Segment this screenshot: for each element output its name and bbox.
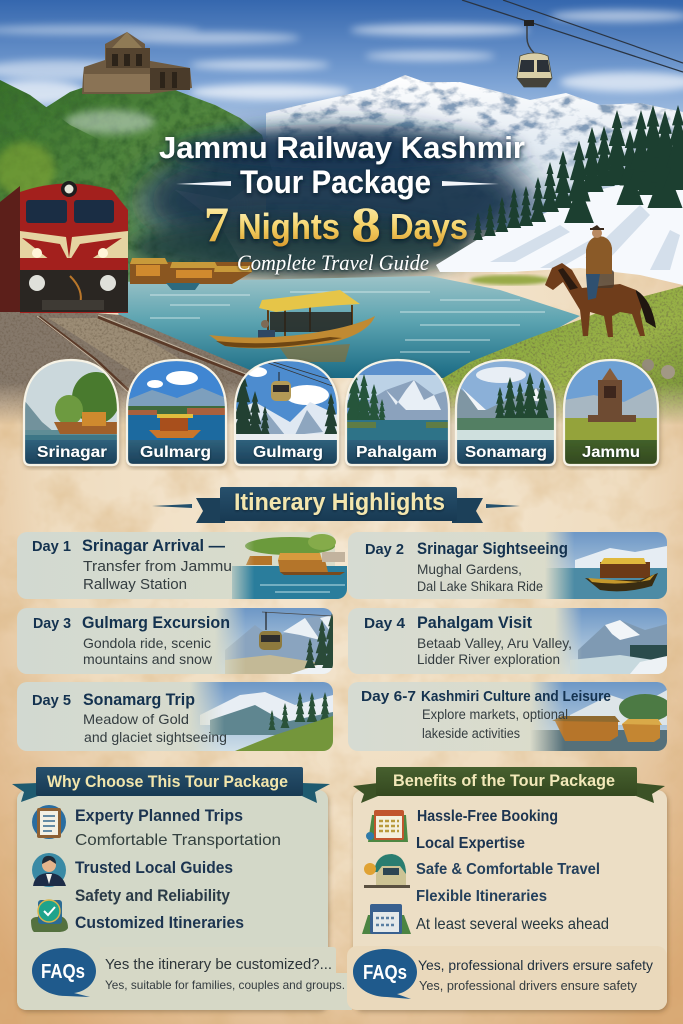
card: Sonamarg [456, 360, 555, 465]
scene: gondola over mountains [215, 608, 342, 674]
day description [83, 711, 227, 745]
itinerary row: Day 5 [17, 682, 333, 751]
icon: shield check [31, 900, 68, 932]
card: Jammu [564, 360, 658, 465]
title line: Tour Package with side rules: Tour Package [240, 164, 431, 200]
FAQ answer: Yes, suitable for families, couples and groups. [105, 978, 345, 992]
day title: Srinagar Arrival — [82, 536, 225, 555]
card label: Srinagar: Srinagar [37, 444, 107, 461]
snowy mountain range [266, 75, 683, 230]
lakeside houseboats [130, 258, 252, 290]
day description [83, 635, 213, 667]
benefit text: At least several weeks ahead [416, 916, 609, 933]
day label: Day 3 [33, 615, 71, 632]
scene: Sonamarg meadow [190, 682, 333, 751]
card: Pahalgam [344, 360, 449, 465]
itinerary row: Day 6-7 [348, 682, 671, 751]
icon: checklist clipboard [32, 805, 66, 839]
card label: Sonamarg: Sonamarg [465, 444, 547, 461]
title line: Jammu Railway Kashmir: Jammu Railway Kashmir [159, 130, 525, 165]
day label: Day 6-7 [361, 688, 416, 705]
card: Gulmarg gondola [231, 360, 339, 465]
FAQ question: Yes, professional drivers ersure safety [418, 957, 653, 973]
icon: local guide [32, 853, 66, 887]
pine forest [473, 105, 683, 240]
day description: lakeside activities [422, 726, 520, 741]
day title: Pahalgam Visit [417, 613, 532, 632]
benefit text: Comfortable Transportation [75, 832, 281, 849]
scene: shikara on lake [545, 532, 667, 599]
day description: Mughal Gardens, [417, 561, 522, 577]
benefit text: Trusted Local Guides [75, 859, 233, 877]
destination cards row [24, 360, 658, 465]
itinerary row: Day 4 [348, 608, 667, 674]
day label: Day 4 [364, 615, 406, 632]
fort hill with mist [46, 88, 266, 194]
scene: houseboats at leisure [530, 682, 671, 751]
card label: Gulmarg: Gulmarg [140, 444, 211, 461]
benefit text: Safe & Comfortable Travel [416, 861, 600, 878]
FAQ bubble [32, 948, 96, 997]
itinerary row: Day 1 [17, 532, 347, 599]
benefit text: Experty Planned Trips [75, 807, 243, 825]
day title: Gulmarg Excursion [82, 613, 230, 632]
card label: Gulmarg second: Gulmarg [253, 444, 323, 461]
icon: planner calendar [362, 904, 411, 934]
horse and rider [545, 225, 656, 337]
title line: Tour Package with side rules [176, 164, 499, 200]
title backdrop haze [130, 130, 530, 277]
itinerary row: Day 3 [17, 608, 342, 674]
panel: why choose this tour package [12, 767, 352, 1010]
day label: Day 2 [365, 541, 404, 558]
day description: Betaab Valley, Aru Valley, [417, 635, 572, 651]
scene: houseboats [225, 534, 347, 599]
FAQ bubble [353, 949, 417, 999]
ribbon banner: Why Choose This Tour Package [47, 772, 288, 791]
section banner: Itinerary Highlights [152, 487, 520, 523]
card label: Jammu: Jammu [582, 444, 640, 461]
hilltop fort [82, 32, 192, 94]
duration: 7 Nights 8 Days: Nights [238, 206, 340, 247]
benefit text: Flexible Itineraries [416, 888, 547, 905]
day description [83, 558, 232, 593]
FAQ question: Yes the itinerary be customized?... [105, 956, 332, 973]
benefit text: Safety and Reliability [75, 887, 231, 905]
benefit text: Hassle-Free Booking [417, 808, 558, 825]
red locomotive [0, 181, 128, 313]
subtitle: Complete Travel Guide [237, 250, 429, 275]
day description [417, 561, 543, 594]
ribbon banner [12, 767, 330, 803]
page title block [159, 130, 525, 275]
card: Gulmarg lake [127, 360, 226, 465]
sky with clouds [0, 0, 683, 140]
day description: Dal Lake Shikara Ride [417, 578, 543, 594]
FAQ bubble: FAQs [41, 961, 85, 983]
lake [110, 276, 580, 378]
duration: 7 Nights 8 Days: 7 [204, 196, 229, 252]
day description: Rallway Station [83, 576, 187, 593]
benefit text: Customized Itineraries [75, 914, 244, 932]
duration: 7 Nights 8 Days: 8 [351, 196, 381, 252]
day description: Meadow of Gold [83, 711, 189, 727]
benefit text: Local Expertise [416, 835, 525, 852]
day description [422, 707, 568, 741]
day title: Kashmiri Culture and Leisure [421, 688, 611, 705]
FAQ strip background [347, 946, 667, 1010]
day description: and glaciet sightseeing [84, 729, 227, 745]
day label: Day 5 [32, 692, 71, 709]
duration: 7 Nights 8 Days: Days [390, 206, 468, 247]
cable car and cables [462, 0, 683, 87]
day description [417, 635, 572, 667]
card label: Pahalgam: Pahalgam [356, 444, 437, 461]
day description: Gondola ride, scenic [83, 635, 211, 651]
hero illustration: Kashmir landscape [0, 0, 683, 430]
right meadow [430, 275, 683, 430]
day description: Lidder River exploration [417, 651, 560, 667]
ribbon banner: Benefits of the Tour Package [393, 771, 615, 790]
scene: Pahalgam valley [555, 608, 667, 674]
snow slope [436, 185, 683, 285]
rail ballast and tracks [0, 312, 250, 422]
left forest slope [0, 80, 245, 285]
day description: Explore markets, optional [422, 707, 568, 722]
day title: Srinagar Sightseeing [417, 539, 568, 558]
panel: benefits of the tour package [347, 767, 667, 1010]
icon: booking calendar [366, 810, 408, 842]
duration: 7 Nights 8 Days [204, 196, 468, 252]
card: Srinagar [24, 360, 120, 465]
day description: Transfer from Jammu [83, 558, 232, 575]
FAQ strip background [17, 947, 352, 1010]
section banner: Itinerary Highlights: Itinerary Highlights [234, 489, 445, 516]
day label: Day 1 [32, 538, 71, 555]
shikara boat [209, 290, 375, 362]
FAQ bubble: FAQs [363, 962, 407, 984]
itinerary row: Day 2 [348, 532, 667, 599]
FAQ answer: Yes, professional drivers ensure safety [419, 979, 638, 993]
icon: safe car [364, 854, 410, 888]
day title: Sonamarg Trip [83, 690, 195, 709]
ribbon banner [353, 767, 665, 803]
day description: mountains and snow [83, 651, 213, 667]
